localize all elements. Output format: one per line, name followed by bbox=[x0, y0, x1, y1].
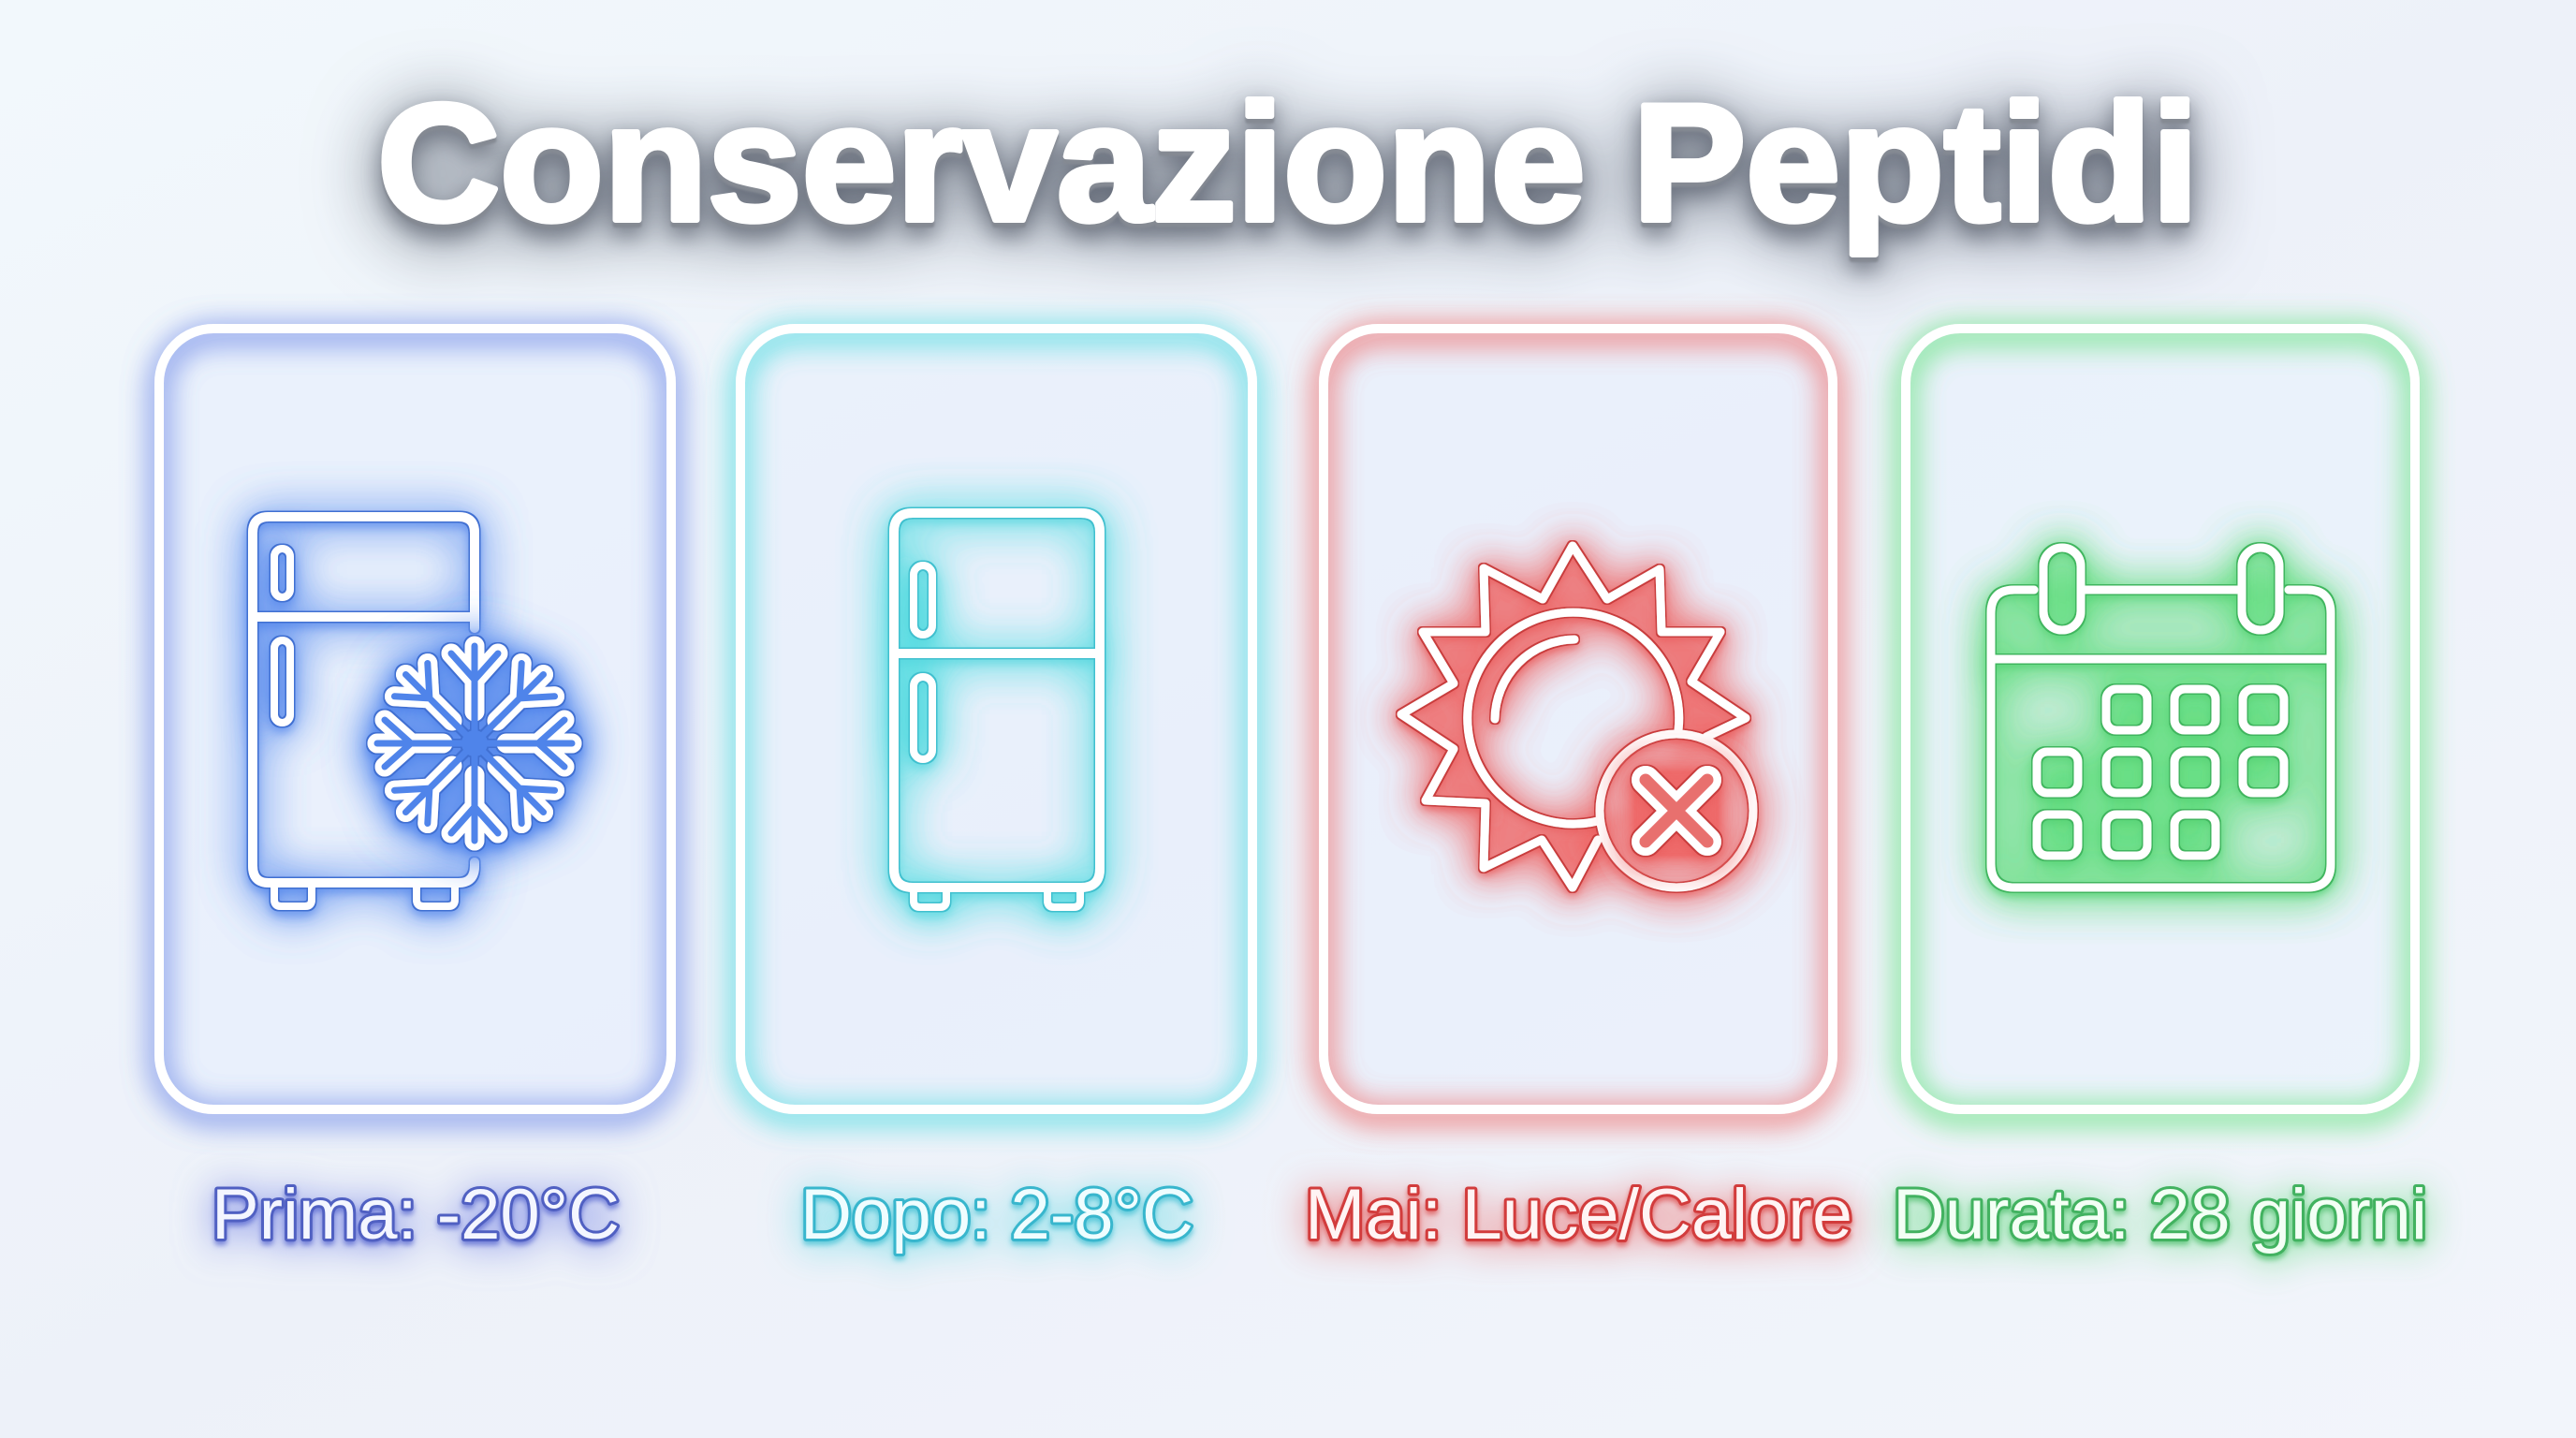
calendar tint bbox=[1991, 590, 2331, 888]
calendar body bbox=[1991, 548, 2331, 888]
sun tint bbox=[1401, 546, 1746, 888]
icon: fridge with snowflake bbox=[253, 517, 572, 906]
card frame: red bbox=[1324, 329, 1833, 1109]
fridge outline bbox=[253, 517, 475, 906]
card interior: neutral tint bbox=[1906, 329, 2415, 1109]
panel: dopo card bbox=[740, 329, 1252, 1255]
icon: snowflake bbox=[377, 646, 572, 841]
card interior: blue tint bbox=[159, 329, 671, 1109]
label: mai: Mai: Luce/Calore bbox=[1305, 1175, 1852, 1255]
panel: durata card bbox=[1893, 329, 2427, 1255]
icon: sun with x bbox=[1401, 546, 1753, 888]
icon: calendar bbox=[1991, 548, 2331, 888]
panel: prima card bbox=[159, 329, 671, 1255]
sun rays and disc bbox=[1401, 546, 1753, 888]
title: Conservazione Peptidi bbox=[377, 69, 2199, 256]
icon: fridge bbox=[894, 513, 1100, 907]
card interior: cyan tint bbox=[740, 329, 1252, 1109]
card interior: neutral tint bbox=[1324, 329, 1833, 1109]
x mark bbox=[1646, 780, 1707, 842]
card frame: cyan bbox=[740, 329, 1252, 1109]
label: dopo: Dopo: 2-8°C bbox=[800, 1175, 1193, 1255]
panel: mai card bbox=[1305, 329, 1852, 1255]
label: durata: Durata: 28 giorni bbox=[1893, 1175, 2427, 1255]
card frame: green bbox=[1906, 329, 2415, 1109]
card frame: blue bbox=[159, 329, 671, 1109]
label: prima: Prima: -20°C bbox=[212, 1175, 620, 1255]
